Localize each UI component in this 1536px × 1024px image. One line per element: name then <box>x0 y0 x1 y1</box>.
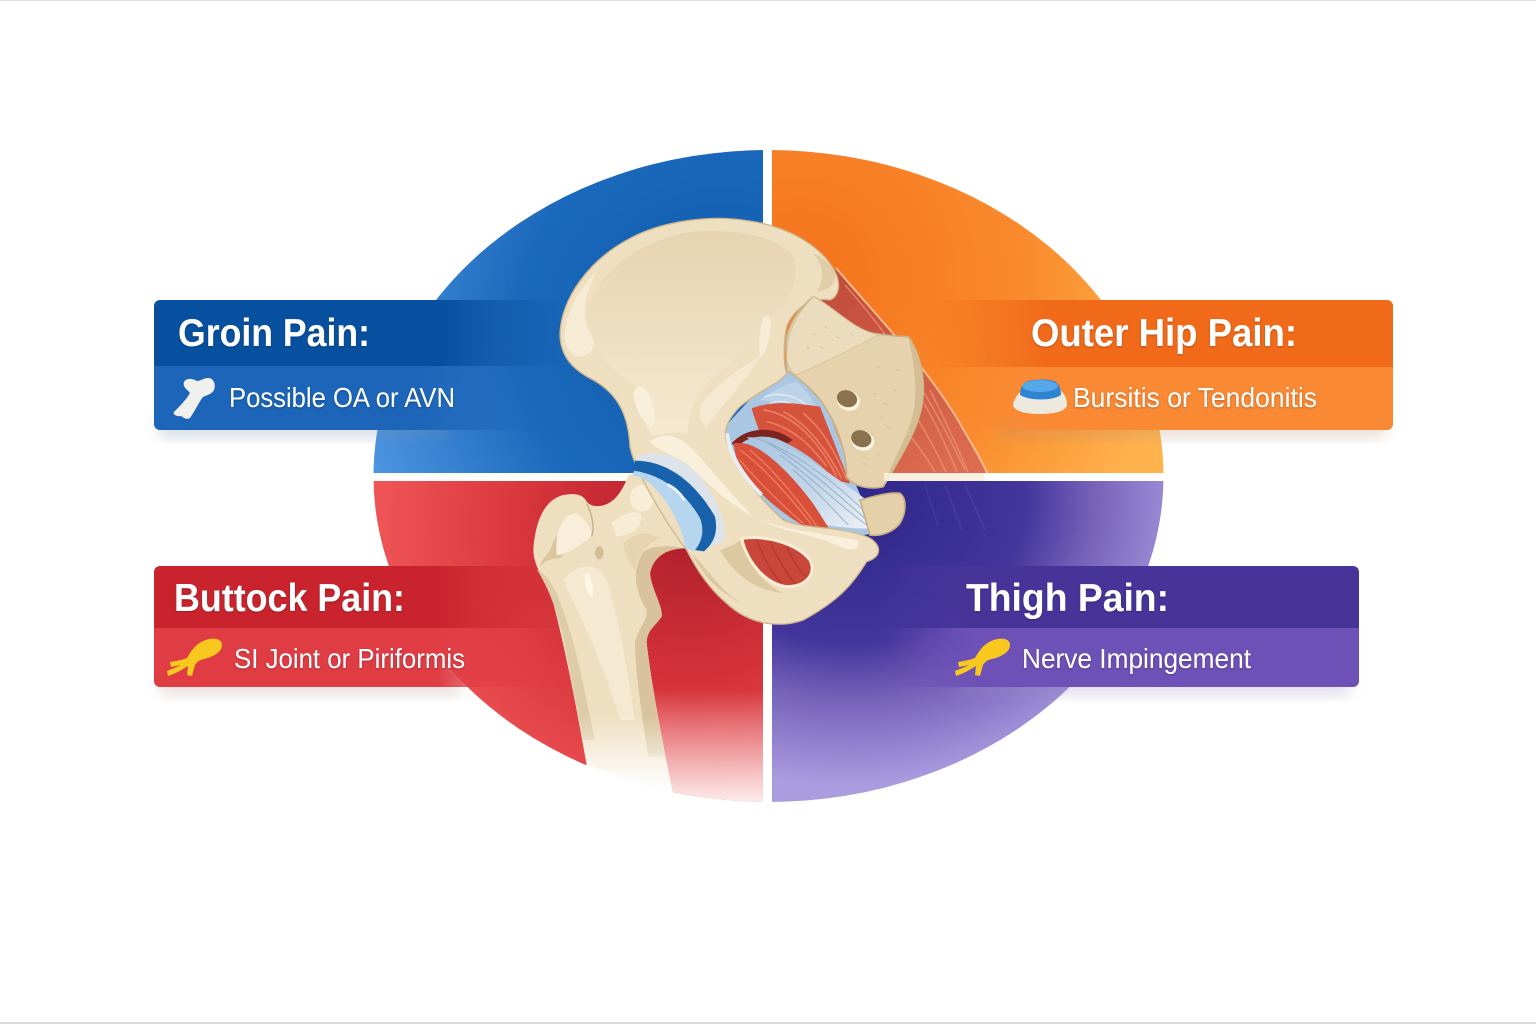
text: possible OA or AVN: Possible OA or AVN <box>229 382 455 413</box>
obturator foramen with muscle <box>742 538 812 587</box>
panel: groin pain <box>154 300 565 438</box>
hip joint capsule <box>633 453 724 551</box>
quadrant: thigh purple <box>772 481 1167 806</box>
heading: buttock pain: Buttock Pain: <box>174 577 405 620</box>
heading: groin pain: Groin Pain: <box>178 312 370 355</box>
heading: thigh pain: Thigh Pain: <box>966 577 1169 620</box>
icon: bone <box>174 378 215 419</box>
heading: outer hip pain: Outer Hip Pain: <box>1031 312 1297 355</box>
quadrant circle <box>370 145 1167 806</box>
sacral foramen lower <box>848 427 877 454</box>
sacrum <box>786 297 923 488</box>
muscle: gluteal fan <box>815 268 987 530</box>
icon: nerve <box>955 639 1010 676</box>
text: SI joint or piriformis: SI Joint or Piriformis <box>234 643 465 674</box>
bone highlights <box>565 272 859 549</box>
sacral foramen upper <box>834 387 863 414</box>
text: nerve impingement: Nerve Impingement <box>1022 643 1251 674</box>
capsule pale blue band <box>633 468 705 551</box>
text: bursitis or tendonitis: Bursitis or Tendonitis <box>1073 382 1317 413</box>
icon: nerve <box>167 639 222 676</box>
quadrant: buttock red <box>370 481 763 806</box>
panel: buttock pain <box>154 566 560 696</box>
sacrum base cream line <box>884 473 984 481</box>
ilium crest shading <box>813 253 835 292</box>
ischial spine <box>860 493 905 535</box>
bone speckles <box>807 327 899 464</box>
window edge highlight <box>727 433 762 495</box>
pelvis and sacrum <box>560 218 923 624</box>
iliac fossa <box>586 231 796 436</box>
hip bone <box>560 218 879 624</box>
muscles and ligaments in pelvic window <box>720 367 877 540</box>
femur <box>533 470 685 795</box>
pubic ramus shading <box>692 540 783 605</box>
quadrant: groin blue <box>370 145 763 473</box>
capsule grey band <box>635 453 724 550</box>
panel: thigh pain <box>870 566 1359 696</box>
femur white underlay <box>553 603 680 813</box>
panel: outer hip pain <box>930 300 1393 438</box>
capsule dark blue stripe <box>633 461 716 551</box>
tendon band <box>747 437 873 528</box>
quadrant: outer hip orange <box>772 145 1167 473</box>
icon: bursa <box>1013 380 1067 414</box>
femur shaft shading <box>537 485 685 757</box>
